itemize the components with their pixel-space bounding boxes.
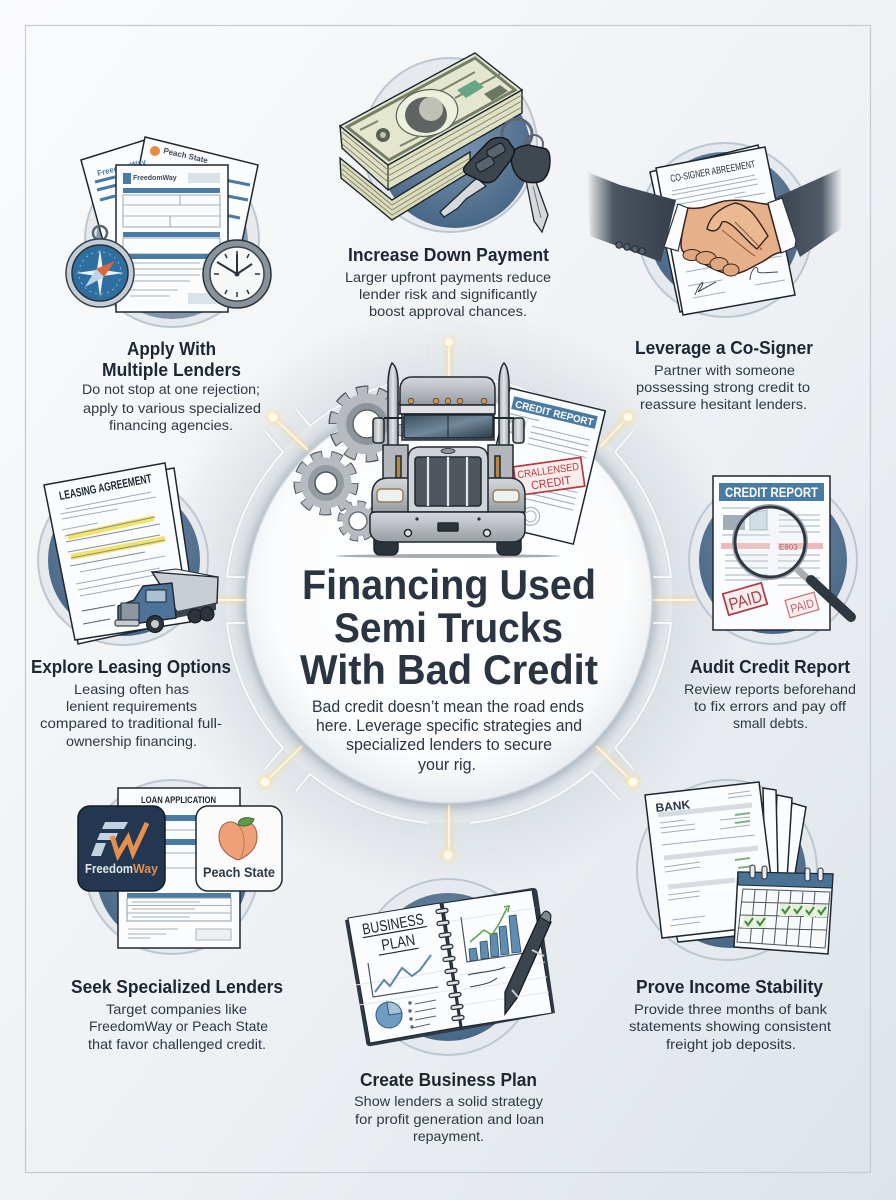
title	[300, 561, 598, 693]
description: statements showing consistent	[629, 1018, 831, 1034]
heading: Prove Income Stability	[636, 977, 823, 997]
subtitle: Bad credit doesn’t mean the road ends	[312, 698, 584, 716]
description: repayment.	[413, 1128, 484, 1144]
description: apply to various specialized	[83, 400, 261, 416]
icon: cash stacks and keys	[340, 53, 550, 232]
document: credit report: CRALLENSED	[517, 461, 580, 481]
central disc	[246, 397, 652, 803]
description: Show lenders a solid strategy	[354, 1093, 543, 1109]
icon: open notebook and pen	[345, 879, 555, 1055]
title: With Bad Credit	[300, 646, 598, 693]
icon: loan application and lender logos: Freedom	[85, 861, 133, 876]
heading: Explore Leasing Options	[31, 657, 231, 677]
description: Do not stop at one rejection;	[82, 381, 260, 397]
subtitle: your rig.	[418, 756, 476, 774]
icon: loan application and lender logos: Way	[133, 861, 159, 876]
document: credit report	[478, 388, 605, 544]
document: credit report: CREDIT REPORT	[514, 399, 594, 429]
icon: gears	[298, 390, 401, 538]
description: boost approval chances.	[369, 303, 527, 319]
subtitle	[312, 698, 584, 774]
subtitle: here. Leverage specific strategies and	[316, 717, 582, 735]
description: Target companies like	[106, 1001, 247, 1017]
description: Provide three months of bank	[634, 1001, 828, 1017]
description	[345, 269, 551, 319]
heading: Audit Credit Report	[690, 657, 850, 677]
title: Semi Trucks	[334, 604, 563, 651]
heading: Seek Specialized Lenders	[71, 977, 283, 997]
description	[82, 381, 261, 433]
description	[354, 1093, 544, 1144]
heading: Multiple Lenders	[102, 360, 241, 380]
icon: credit report with magnifier: CREDIT REPORT	[725, 485, 819, 500]
panel: increase down payment	[340, 53, 551, 319]
connector spokes	[218, 336, 696, 862]
description: Larger upfront payments reduce	[345, 269, 551, 285]
description: Leasing often has	[74, 681, 189, 697]
icon: credit report with magnifier: E803	[779, 543, 798, 552]
ring of connector brackets around the centre	[227, 345, 671, 860]
description: Partner with someone	[654, 362, 795, 378]
heading: Increase Down Payment	[348, 245, 549, 265]
description: financing agencies.	[109, 417, 233, 433]
description: possessing strong credit to	[636, 379, 810, 395]
icon: loan application and lender logos: LOAN APPLICATION	[141, 795, 216, 806]
document: credit report: CREDIT	[530, 473, 572, 493]
icon: application forms, compass and clock: Peach State	[163, 146, 209, 165]
panel: audit credit report	[684, 476, 857, 731]
panel: seek specialized lenders	[71, 780, 283, 1052]
panel: apply with multiple lenders	[66, 137, 271, 433]
heading: Apply With	[127, 339, 216, 359]
description: lenient requirements	[66, 698, 197, 714]
description: freight job deposits.	[666, 1036, 796, 1052]
icon: handshake over agreement: CO-SIGNER ABREEMENT	[670, 159, 756, 185]
icon: handshake over agreement	[587, 143, 842, 317]
description: for profit generation and loan	[355, 1111, 544, 1127]
icon: credit report with magnifier: PAID	[789, 596, 816, 616]
description	[629, 1001, 831, 1052]
shaded halo and band around the centre	[154, 305, 744, 895]
panel: leverage a co-signer	[587, 143, 842, 412]
panel: explore leasing options	[31, 463, 231, 749]
icon: credit report with magnifier	[689, 476, 857, 644]
description: ownership financing.	[66, 733, 197, 749]
icon: application forms, compass and clock	[66, 137, 271, 327]
subtitle: specialized lenders to secure	[346, 736, 552, 754]
icon: loan application and lender logos	[78, 780, 282, 954]
central illustration: truck, gears and credit report	[298, 363, 605, 558]
icon: application forms, compass and clock: FreedomWay	[133, 175, 177, 182]
document: credit report: 9 s	[508, 421, 525, 436]
icon: semi truck front	[336, 363, 560, 558]
icon: bank statements and calendar: BANK	[655, 797, 691, 815]
panel: prove income stability	[629, 780, 833, 1052]
icon: loan application and lender logos: Peach State	[203, 864, 275, 880]
central disc shadow	[246, 400, 652, 806]
description: FreedomWay or Peach State	[89, 1018, 268, 1034]
heading: Leverage a Co-Signer	[635, 338, 813, 358]
description	[88, 1001, 268, 1052]
icon: credit report with magnifier: PAID	[726, 587, 764, 614]
description	[636, 362, 810, 412]
description: reassure hesitant lenders.	[640, 396, 807, 412]
description: that favor challenged credit.	[88, 1036, 266, 1052]
icon: open notebook and pen: PLAN	[380, 932, 417, 954]
icon: leasing agreement and box truck	[38, 463, 218, 645]
description: lender risk and significantly	[359, 286, 537, 302]
icon: bank statements and calendar	[637, 780, 833, 960]
description: small debts.	[733, 715, 808, 731]
heading: Create Business Plan	[360, 1070, 537, 1090]
panel: create business plan	[345, 879, 555, 1144]
description	[684, 681, 856, 731]
description: to fix errors and pay off	[694, 698, 846, 714]
icon: application forms, compass and clock: FreedomWay	[96, 157, 147, 178]
description	[40, 681, 222, 749]
icon: open notebook and pen: BUSINESS	[361, 911, 425, 939]
icon: leasing agreement and box truck: LEASING AGREEMENT	[58, 471, 153, 503]
heading	[102, 339, 241, 380]
description: compared to traditional full-	[40, 715, 222, 731]
title: Financing Used	[302, 561, 596, 608]
description: Review reports beforehand	[684, 681, 856, 697]
